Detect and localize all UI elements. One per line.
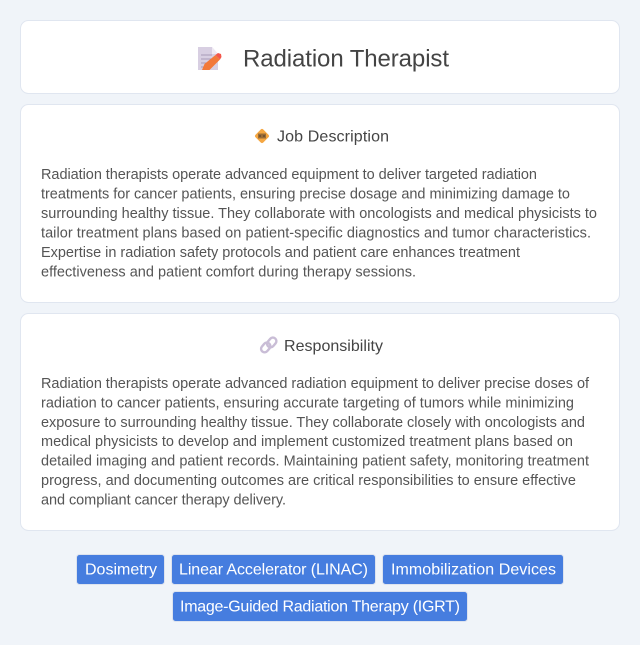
panel: job description <box>20 104 620 302</box>
text block: responsibility <box>41 376 590 508</box>
text block: job description: tailor treatment plans based on patient-specific diagnostics and tumor characteristics. <box>41 226 591 242</box>
panel: title header <box>20 20 620 94</box>
text block: job description: Expertise in radiation safety protocols and patient care enhances treatment <box>41 245 520 261</box>
text block: responsibility: Radiation therapists operate advanced radiation equipment to deliver precise doses of <box>41 376 590 392</box>
text block: responsibility: radiation to cancer patients, ensuring accurate targeting of tumors while minimizing <box>41 395 574 411</box>
text block: job description: Radiation therapists operate advanced equipment to deliver targeted radiation <box>41 167 537 183</box>
icon: diamond sign <box>254 128 270 144</box>
panel: responsibility <box>20 314 620 530</box>
tag: immobilization devices: Immobilization Devices <box>391 562 556 578</box>
text block: job description <box>41 167 597 280</box>
icon: document with pencil <box>198 47 222 70</box>
tag: dosimetry <box>76 554 164 584</box>
text block: job description: surrounding healthy tissue. They collaborate with oncologists and medical physicists to <box>41 206 597 222</box>
text block: responsibility: medical physicists to develop and implement customized treatment plans based on <box>41 434 573 450</box>
text block: job description: effectiveness and patient comfort during therapy sessions. <box>41 264 416 280</box>
tag: linear accelerator <box>172 554 376 584</box>
heading: job description: Job Description <box>277 128 389 146</box>
tag: dosimetry: Dosimetry <box>85 562 157 578</box>
tag: image-guided radiation therapy <box>172 592 468 622</box>
text block: responsibility: detailed imaging and patient records. Maintaining patient safety, monitoring treatment <box>41 454 589 470</box>
tag: image-guided radiation therapy: Image-Guided Radiation Therapy (IGRT) <box>180 598 460 616</box>
icon: chain link <box>260 336 278 354</box>
text block: responsibility: exposure to surrounding healthy tissue. They collaborate closely with oncologists and <box>41 415 585 431</box>
text block: job description: treatments for cancer patients, ensuring precise dosage and minimizing damage to <box>41 186 570 202</box>
title: Radiation Therapist <box>243 46 449 72</box>
text block: responsibility: progress, and documenting outcomes are critical responsibilities to ensure effective <box>41 473 576 489</box>
heading: responsibility: Responsibility <box>284 338 383 355</box>
tag: linear accelerator: Linear Accelerator (LINAC) <box>179 562 368 578</box>
tag: immobilization devices <box>382 554 564 584</box>
text block: responsibility: and compliant cancer therapy delivery. <box>41 492 286 508</box>
